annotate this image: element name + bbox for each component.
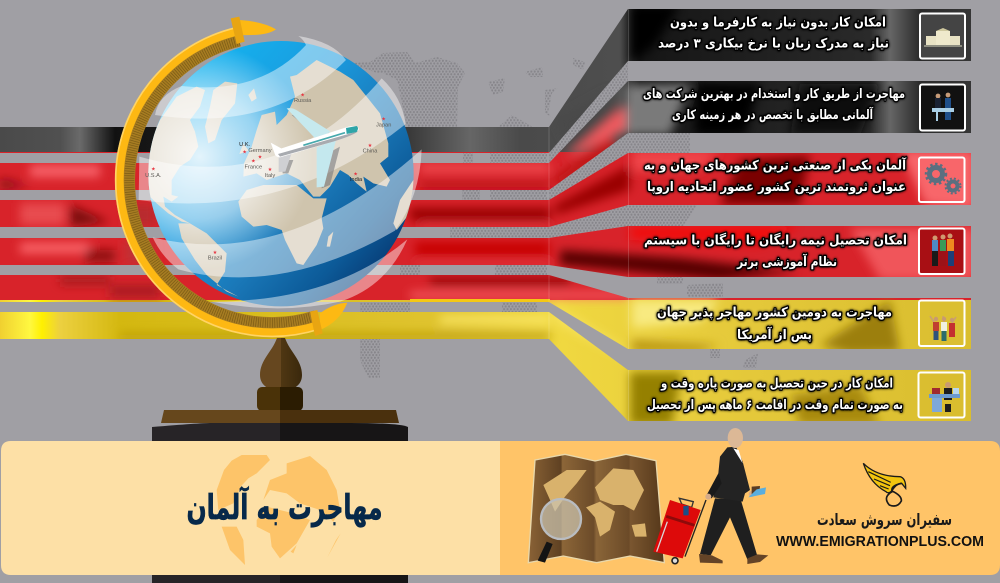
map stars <box>151 92 386 256</box>
gold stripe <box>0 300 1000 430</box>
pedestal onion <box>260 338 302 388</box>
row 1 text: نیاز به مدرک زبان با نرخ بیکاری ۳ درصد <box>658 36 889 52</box>
red stripe <box>0 152 1000 300</box>
row 2 text <box>643 87 905 123</box>
golden meridian ring <box>116 28 320 336</box>
businessman <box>699 428 768 564</box>
city labels and stars: Brazil <box>208 255 222 261</box>
city labels and stars: U.K. <box>239 142 251 148</box>
pedestal collar <box>257 387 303 411</box>
illustration: map and traveller <box>528 428 768 564</box>
red stripe hairline to gold <box>410 299 550 302</box>
dotted world map background <box>353 52 758 378</box>
red suitcase <box>653 498 706 564</box>
map stars: ★ <box>151 167 156 173</box>
map stars: ★ <box>251 158 256 164</box>
map stars: ★ <box>353 172 358 178</box>
sphere highlight <box>148 41 414 306</box>
city labels and stars: China <box>363 149 378 155</box>
row 4 text <box>644 232 907 270</box>
row 1 text: امکان کار بدون نیاز به کارفرما و بدون <box>670 16 886 30</box>
icon frame: building <box>920 14 965 58</box>
row 5 text: مهاجرت به دومین کشور مهاجر پذیر جهان <box>657 306 892 320</box>
city labels and stars: India <box>350 177 363 183</box>
city labels and stars <box>145 92 391 261</box>
row 1 text <box>658 16 889 52</box>
row 6 text <box>647 376 903 413</box>
website url: WWW.EMIGRATIONPLUS.COM <box>776 534 984 550</box>
map stars: ★ <box>300 92 305 98</box>
map stars: ★ <box>268 167 273 173</box>
icon: airplane <box>271 108 359 188</box>
map labels: Russia <box>294 98 312 104</box>
row 4 text: امکان تحصیل نیمه رایگان تا رایگان با سیستم <box>644 232 907 248</box>
seam lines <box>548 126 550 340</box>
row 2 text: مهاجرت از طریق کار و استخدام در بهترین شرکت های <box>643 87 905 102</box>
black base <box>152 423 408 445</box>
faint world map globe <box>217 455 341 565</box>
map stars: ★ <box>258 155 263 161</box>
row 4 text: نظام آموزشی برتر <box>736 253 837 270</box>
ring top tip <box>240 20 276 35</box>
icon frame: students <box>919 228 964 274</box>
info rows text <box>643 16 907 413</box>
wooden plate <box>161 410 399 423</box>
city labels and stars: Italy <box>265 173 275 179</box>
row 3 text: عنوان ثروتمند ترین کشور عضور اتحادیه اروپا <box>647 180 906 195</box>
panel: title banner <box>1 441 500 575</box>
cloth shading <box>0 5 975 425</box>
globe stand pedestal <box>152 338 408 583</box>
city labels and stars: U.S.A. <box>145 173 162 179</box>
company name: سفیران سروش سعادت <box>817 510 952 529</box>
city labels and stars: France <box>245 165 262 171</box>
globe sphere <box>148 41 414 306</box>
icon frame: desk worker <box>918 372 964 418</box>
ring bottom clamp <box>310 310 323 336</box>
german flag ribbons <box>0 0 1000 430</box>
row 6 text: امکان کار در حین تحصیل به صورت پاره وقت و <box>660 376 893 392</box>
panel: brand banner <box>500 428 1000 575</box>
folded world map <box>528 454 664 563</box>
city labels and stars: Japan <box>376 122 391 128</box>
ring top clamp <box>231 17 245 44</box>
ring bottom tip <box>320 303 347 330</box>
row 5 text <box>657 306 892 343</box>
row 6 text: به صورت تمام وقت در اقامت ۶ ماهه پس از تحصیل <box>647 398 903 413</box>
translucent white ribbons around globe <box>139 36 422 308</box>
magnifier <box>538 499 581 563</box>
row 2 text: آلمانی مطابق با تخصص در هر زمینه کاری <box>672 106 873 123</box>
globe with ring <box>116 17 422 336</box>
title: مهاجرت به آلمان <box>186 486 382 528</box>
black stripe <box>0 0 1000 152</box>
icon frame: cheering people <box>919 300 964 346</box>
map stars: ★ <box>381 116 386 122</box>
continents <box>147 60 415 297</box>
black base bottom <box>152 570 408 583</box>
company logo <box>863 463 906 506</box>
city labels and stars: Germany <box>248 148 272 154</box>
icon frame: business handshake <box>920 84 965 130</box>
row 3 text: آلمان یکی از صنعتی ترین کشورهای جهان و به <box>644 156 906 174</box>
row 3 text <box>644 156 906 195</box>
row 5 text: پس از آمریکا <box>737 326 812 343</box>
icon frame: gears <box>919 158 964 202</box>
map stars: ★ <box>213 250 218 256</box>
map stars: ★ <box>368 143 373 149</box>
map stars: ★ <box>242 149 247 155</box>
